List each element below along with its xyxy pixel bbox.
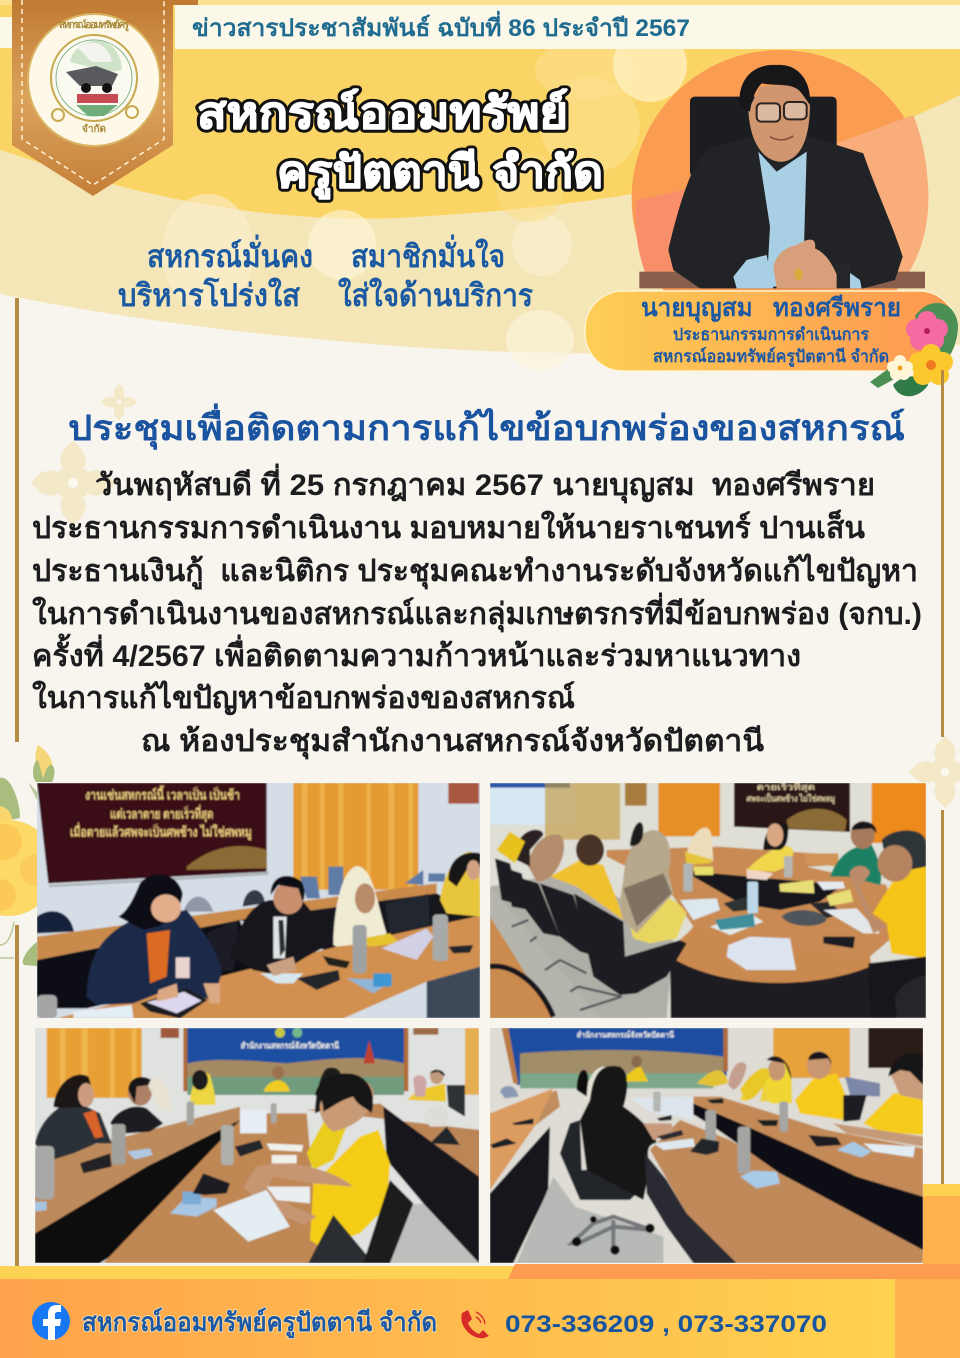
icon: cooperative seal xyxy=(28,14,160,146)
facebook page name: สหกรณ์ออมทรัพย์ครูปัตตานี จำกัด xyxy=(82,1307,437,1339)
portrait xyxy=(632,50,928,347)
slogans: สหกรณ์มั่นคง xyxy=(147,234,313,274)
photo: long table, woman in black, yellow shirts xyxy=(490,1028,923,1263)
slogans: ใส่ใจด้านบริการ xyxy=(338,277,533,313)
ribbon with logo xyxy=(12,0,198,196)
body text: ณ ห้องประชุมสำนักงานสหกรณ์จังหวัดปัตตานี xyxy=(141,724,765,760)
body text: ประธานกรรมการดำเนินงาน มอบหมายให้นายราเชนทร์ ปานเส็น xyxy=(32,509,865,545)
name pill: นายบุญสม ทองศรีพราย xyxy=(641,294,901,324)
footer band background xyxy=(0,1184,960,1358)
photo: meeting, banner and three officials xyxy=(37,783,480,1018)
icon: tropical flowers xyxy=(870,303,958,396)
title xyxy=(197,88,603,199)
icon: cooperative seal: สหกรณ์ออมทรัพย์ครู xyxy=(59,19,130,32)
photo: long table, woman in black, yellow shirts: สำนักงานสหกรณ์จังหวัดปัตตานี xyxy=(577,1029,674,1039)
photo: meeting, banner and three officials: แต่เวลาตาย ตายเร็วที่สุด xyxy=(110,803,213,822)
name pill: ประธานกรรมการดำเนินการ xyxy=(673,325,870,344)
icon: facebook xyxy=(32,1302,70,1340)
title: สหกรณ์ออมทรัพย์ xyxy=(197,88,568,138)
title: สหกรณ์ออมทรัพย์ xyxy=(197,88,568,138)
footer xyxy=(0,1184,960,1358)
name pill: สหกรณ์ออมทรัพย์ครูปัตตานี จำกัด xyxy=(653,346,889,368)
icon: telephone xyxy=(461,1310,489,1338)
icon: cooperative seal: จำกัด xyxy=(82,123,106,135)
icon: thai ornaments xyxy=(30,384,960,808)
photo: long table view toward blue backdrop: สำนักงานสหกรณ์จังหวัดปัตตานี xyxy=(241,1040,339,1050)
gold vertical frame lines xyxy=(15,298,944,1266)
photo: long table view toward blue backdrop xyxy=(35,1028,479,1263)
body text: ครั้งที่ 4/2567 เพื่อติดตามความก้าวหน้าและร่วมหาแนวทาง xyxy=(32,633,801,673)
photo: curved table with participants: ศพจะเป็นศพช้าง ไม่ใช่ศพหมู xyxy=(747,792,835,805)
photo: meeting, banner and three officials: เมื่อตายแล้วศพจะเป็นศพช้าง ไม่ใช่ศพหมู xyxy=(70,822,252,841)
heading: ประชุมเพื่อติดตามการแก้ไขข้อบกพร่องของสหกรณ์ xyxy=(68,403,905,450)
body text: ประธานเงินกู้ และนิติกร ประชุมคณะทำงานระดับจังหวัดแก้ไขปัญหา xyxy=(32,553,918,590)
title: ครูปัตตานี จำกัด xyxy=(277,148,603,199)
icon: yellow flower left xyxy=(0,745,56,966)
panel: header background xyxy=(0,0,960,370)
photo: curved table with participants xyxy=(490,780,926,1018)
phone numbers: 073-336209 , 073-337070 xyxy=(505,1311,827,1338)
slogans xyxy=(118,234,533,313)
photo: curved table with participants: ตายเร็วที่สุด xyxy=(757,780,815,793)
title: ครูปัตตานี จำกัด xyxy=(277,148,603,199)
name pill xyxy=(585,291,957,371)
body text: ในการดำเนินงานของสหกรณ์และกลุ่มเกษตรกรที่มีข้อบกพร่อง (จกบ.) xyxy=(32,592,922,633)
body text: ในการแก้ไขปัญหาข้อบกพร่องของสหกรณ์ xyxy=(32,680,575,716)
issue strip: ข่าวสารประชาสัมพันธ์ ฉบับที่ 86 ประจำปี 2567 xyxy=(192,10,690,42)
body text xyxy=(32,463,922,760)
photo: meeting, banner and three officials: งานเช่นสหกรณ์นี้ เวลาเป็น เป็นช้า xyxy=(85,784,240,802)
body text: วันพฤหัสบดี ที่ 25 กรกฎาคม 2567 นายบุญสม ทองศรีพราย xyxy=(95,463,875,504)
slogans: สมาชิกมั่นใจ xyxy=(351,234,505,274)
slogans: บริหารโปร่งใส xyxy=(118,277,300,313)
issue strip xyxy=(0,5,960,49)
